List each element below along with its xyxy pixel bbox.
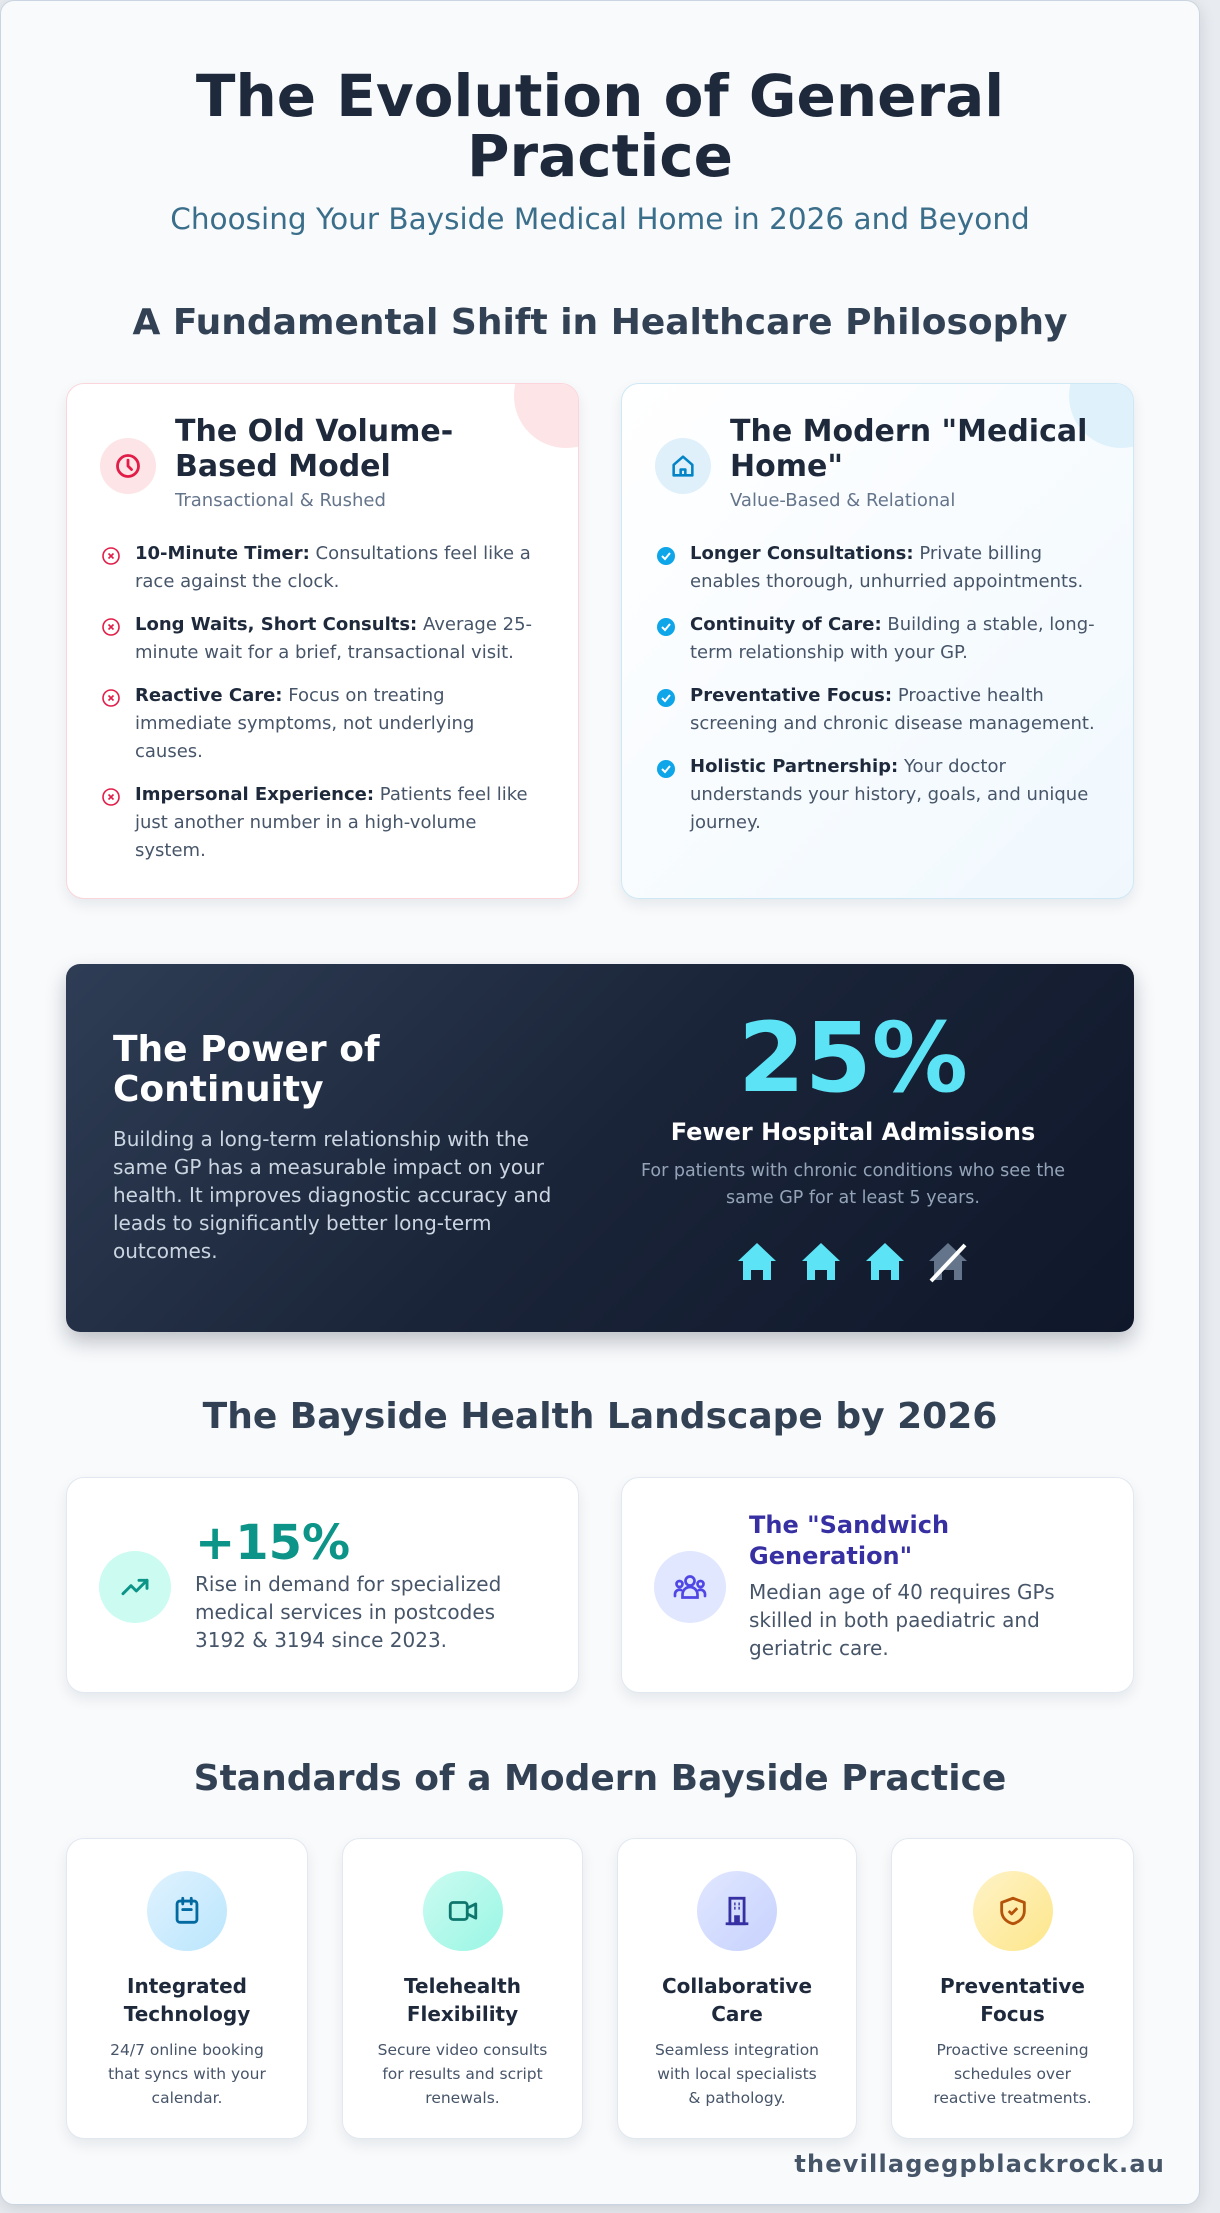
- stat: 25%: 25%: [738, 1002, 968, 1114]
- footer url: thevillagegpblackrock.au: [794, 2150, 1165, 2178]
- old model list: Reactive Care: Focus on treating: [135, 685, 445, 706]
- panel: power of continuity: [66, 964, 1134, 1332]
- old model list: 10-Minute Timer: Consultations feel like a race against the clock.: [135, 543, 531, 592]
- stat label: Fewer Hospital Admissions: [671, 1118, 1035, 1146]
- icon: trending up: [99, 1551, 171, 1623]
- icon: people: [654, 1551, 726, 1623]
- sandwich text: Median age of 40 requires GPs skilled in both paediatric and geriatric care.: [749, 1580, 1055, 1660]
- card: preventative focus: [891, 1838, 1134, 2139]
- card: telehealth: [342, 1838, 583, 2139]
- icon: house: [655, 438, 711, 494]
- modern title: The Modern "Medical: [730, 414, 1087, 449]
- sandwich title: Generation": [749, 1542, 912, 1570]
- modern list: Longer Consultations: Private billing enables thorough, unhurried appointments.: [690, 543, 1083, 592]
- old model subtitle: Transactional & Rushed: [175, 490, 386, 511]
- card: integrated technology: 24/7 online booking that syncs with your calendar.: [108, 2041, 266, 2107]
- card: telehealth: Secure video consults for results and script renewals.: [378, 2041, 547, 2107]
- old model list: [102, 543, 532, 861]
- stat note: [641, 1161, 1065, 1208]
- icon: shield: [972, 1871, 1052, 1951]
- stat note: For patients with chronic conditions who see the: [641, 1161, 1065, 1181]
- icons: houses: [738, 1243, 967, 1282]
- heading: fundamental shift: A Fundamental Shift in Healthcare Philosophy: [132, 302, 1068, 343]
- panel: demand stat: [66, 1477, 579, 1693]
- continuity heading: [113, 1029, 380, 1110]
- continuity heading: The Power of: [113, 1029, 380, 1070]
- stat note: same GP for at least 5 years.: [726, 1188, 980, 1208]
- card: integrated technology: Technology: [124, 2002, 250, 2026]
- icon: building: [697, 1871, 777, 1951]
- sandwich title: [749, 1511, 949, 1570]
- old model list: immediate symptoms, not underlying causes.: [135, 713, 474, 762]
- continuity heading: Continuity: [113, 1069, 324, 1110]
- modern title: [730, 414, 1087, 484]
- card: preventative focus: Focus: [980, 2002, 1045, 2026]
- modern title: Home": [730, 449, 843, 484]
- modern list: Continuity of Care: Building a stable, long-term relationship with your GP.: [690, 614, 1095, 663]
- demand text: Rise in demand for specialized medical services in postcodes 3192 & 3194 since 2023.: [195, 1572, 501, 1652]
- panel: modern medical home: [621, 383, 1134, 899]
- modern list: Holistic Partnership: Your doctor understands your history, goals, and unique journey.: [690, 756, 1088, 833]
- old model list: Long Waits, Short Consults: Average 25-minute wait for a brief, transactional visit.: [135, 614, 532, 663]
- icon: video: [422, 1871, 502, 1951]
- card: collaborative care: & pathology.: [688, 2089, 786, 2107]
- icon: calendar: [147, 1871, 227, 1951]
- old model title: Based Model: [175, 449, 391, 484]
- card: telehealth: Telehealth: [404, 1974, 521, 1998]
- card: collaborative care: Collaborative: [662, 1974, 812, 1998]
- card: telehealth: Flexibility: [407, 2002, 518, 2026]
- card: collaborative care: Care: [711, 2002, 763, 2026]
- old model list: Impersonal Experience: Patients feel like just another number in a high-volume system.: [135, 784, 528, 861]
- panel: sandwich generation: [621, 1477, 1134, 1693]
- title: [196, 62, 1004, 190]
- card: integrated technology: [66, 1838, 308, 2139]
- card: integrated technology: Integrated: [127, 1974, 247, 1998]
- card: preventative focus: Preventative: [940, 1974, 1085, 1998]
- title: The Evolution of General: [196, 62, 1004, 130]
- title: Practice: [467, 122, 733, 190]
- modern subtitle: Value-Based & Relational: [730, 490, 955, 511]
- card: preventative focus: Proactive screening schedules over reactive treatments.: [933, 2041, 1092, 2107]
- card: collaborative care: [617, 1838, 857, 2139]
- old model title: The Old Volume-: [175, 414, 453, 449]
- sandwich title: The "Sandwich: [749, 1511, 949, 1539]
- modern list: Preventative Focus: Proactive health screening and chronic disease management.: [690, 685, 1095, 734]
- card: collaborative care: Seamless integration with local specialists: [655, 2041, 819, 2083]
- old model title: [175, 414, 453, 484]
- continuity text: Building a long-term relationship with the same GP has a measurable impact on your health. It improves diagnostic accuracy and leads to significantly better long-term outcomes.: [113, 1127, 551, 1263]
- panel: old model: [66, 383, 579, 899]
- subtitle: Choosing Your Bayside Medical Home in 2026 and Beyond: [170, 202, 1030, 236]
- icon: clock: [100, 438, 156, 494]
- heading: landscape: The Bayside Health Landscape by 2026: [203, 1396, 997, 1437]
- modern list: [657, 543, 1095, 833]
- heading: standards: Standards of a Modern Bayside Practice: [194, 1758, 1006, 1799]
- stat +15%: +15%: [195, 1515, 350, 1571]
